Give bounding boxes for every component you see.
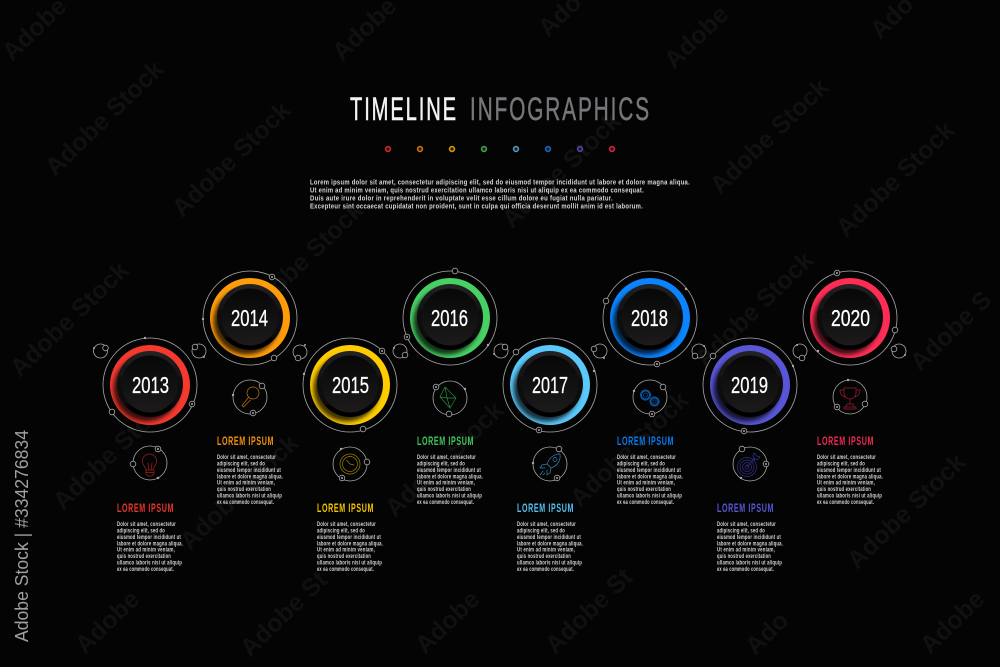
body 2019: ex ea commodo consequat. — [717, 566, 774, 573]
colored dots row — [386, 147, 614, 151]
watermark pattern: Adobe — [410, 585, 485, 659]
year 2017: 2017 — [532, 372, 568, 398]
body 2016: eiusmod tempor incididunt ut — [417, 467, 481, 474]
body 2013: adipiscing elit, sed do — [117, 527, 165, 534]
title: TIMELINE — [350, 91, 458, 127]
body 2017: ullamco laboris nisi ut aliquip — [517, 560, 582, 567]
watermark pattern: Ado — [740, 606, 794, 660]
watermark pattern: Adobe Stock — [5, 256, 134, 382]
watermark pattern: Adobe — [915, 585, 990, 659]
body 2018: ex ea commodo consequat. — [617, 499, 674, 506]
title — [350, 91, 651, 127]
body 2016: adipiscing elit, sed do — [417, 460, 465, 467]
year 2013: 2013 — [132, 372, 169, 398]
year 2018: 2018 — [631, 305, 668, 331]
body 2016: labore et dolore magna aliqua. — [417, 473, 483, 480]
body 2015: ullamco laboris nisi ut aliquip — [317, 560, 382, 567]
body 2017: Dolor sit amet, consectetur — [517, 521, 576, 528]
milestone 2018 — [603, 271, 697, 367]
milestone 2015 — [303, 338, 397, 432]
year 2016: 2016 — [431, 305, 468, 331]
body 2015: eiusmod tempor incididunt ut — [317, 534, 381, 541]
body 2014: quis nostrud exercitation — [217, 486, 271, 493]
body 2015: quis nostrud exercitation — [317, 553, 371, 560]
heading 2016: LOREM IPSUM — [417, 436, 474, 448]
body 2017: Ut enim ad minim veniam, — [517, 547, 575, 554]
body 2019: adipiscing elit, sed do — [717, 527, 765, 534]
watermark pattern: Adobe Stock — [167, 96, 296, 222]
year 2019: 2019 — [731, 372, 768, 398]
title: INFOGRAPHICS — [470, 91, 651, 127]
year 2015: 2015 — [332, 372, 369, 398]
heading 2019: LOREM IPSUM — [717, 503, 774, 515]
watermark pattern: Adobe Stock — [380, 396, 509, 522]
text block: 2015 — [317, 503, 383, 573]
body 2020: ex ea commodo consequat. — [817, 499, 874, 506]
body 2014: ex ea commodo consequat. — [217, 499, 274, 506]
body 2015: Dolor sit amet, consectetur — [317, 521, 376, 528]
text block: 2018 — [617, 436, 683, 506]
heading 2017: LOREM IPSUM — [517, 503, 574, 515]
body 2013: quis nostrud exercitation — [117, 553, 171, 560]
body 2015: labore et dolore magna aliqua. — [317, 540, 383, 547]
text block: 2019 — [717, 503, 783, 573]
body 2013 — [117, 521, 183, 573]
milestone 2014 — [202, 271, 297, 365]
body 2014: Dolor sit amet, consectetur — [217, 454, 276, 461]
body 2018: quis nostrud exercitation — [617, 486, 671, 493]
body 2017: ex ea commodo consequat. — [517, 566, 574, 573]
body 2018: ullamco laboris nisi ut aliquip — [617, 493, 682, 500]
body 2019: labore et dolore magna aliqua. — [717, 540, 783, 547]
body 2013: labore et dolore magna aliqua. — [117, 540, 183, 547]
icon: rocket — [532, 446, 567, 481]
body 2018: Dolor sit amet, consectetur — [617, 454, 676, 461]
text block: 2020 — [817, 436, 883, 506]
year 2020: 2020 — [831, 305, 870, 331]
body 2016: quis nostrud exercitation — [417, 486, 471, 493]
watermark pattern: Adobe S — [905, 286, 997, 376]
body 2018 — [617, 454, 683, 506]
body 2019: eiusmod tempor incididunt ut — [717, 534, 781, 541]
text block: 2016 — [417, 436, 483, 506]
watermark pattern: Adobe Stock — [497, 107, 626, 233]
body 2020: eiusmod tempor incididunt ut — [817, 467, 881, 474]
body 2016: Ut enim ad minim veniam, — [417, 480, 475, 487]
body 2016: ex ea commodo consequat. — [417, 499, 474, 506]
icon: gears — [633, 380, 667, 417]
body 2019: quis nostrud exercitation — [717, 553, 771, 560]
body 2018: Ut enim ad minim veniam, — [617, 480, 675, 487]
intro paragraph: Excepteur sint occaecat cupidatat non proident, sunt in culpa qui officia deserunt mollit anim id est laborum. — [310, 202, 643, 210]
intro paragraph: Lorem ipsum dolor sit amet, consectetur adipiscing elit, sed do eiusmod tempor incididunt ut labore et dolore magna aliqua. — [310, 178, 690, 186]
watermark pattern: Adobe Stock — [40, 55, 169, 181]
body 2020: Dolor sit amet, consectetur — [817, 454, 876, 461]
body 2020: Ut enim ad minim veniam, — [817, 480, 875, 487]
intro paragraph — [310, 178, 690, 210]
heading 2020: LOREM IPSUM — [817, 436, 874, 448]
watermark pattern: Adobe Stock — [831, 116, 960, 242]
heading 2014: LOREM IPSUM — [217, 436, 274, 448]
body 2017: eiusmod tempor incididunt ut — [517, 534, 581, 541]
body 2016: Dolor sit amet, consectetur — [417, 454, 476, 461]
body 2017: quis nostrud exercitation — [517, 553, 571, 560]
icon: light bulb — [130, 446, 167, 480]
body 2015: ex ea commodo consequat. — [317, 566, 374, 573]
watermark pattern: Adobe Stock — [48, 389, 177, 515]
body 2013: Ut enim ad minim veniam, — [117, 547, 175, 554]
body 2013: eiusmod tempor incididunt ut — [117, 534, 181, 541]
body 2015: Ut enim ad minim veniam, — [317, 547, 375, 554]
body 2019: Dolor sit amet, consectetur — [717, 521, 776, 528]
side credit: Adobe Stock | #334276834 — [12, 430, 32, 642]
milestone 2019 — [703, 338, 797, 434]
body 2020: adipiscing elit, sed do — [817, 460, 865, 467]
body 2019 — [717, 521, 783, 573]
icon: magnifier — [232, 380, 267, 416]
watermark pattern: Adobe Stock — [240, 196, 369, 322]
watermark pattern: Adobe Stock — [690, 246, 819, 372]
body 2015 — [317, 521, 383, 573]
intro paragraph: Duis aute irure dolor in reprehenderit in voluptate velit esse cillum dolore eu fugiat nulla pariatur. — [310, 194, 613, 202]
icon: target — [733, 446, 769, 481]
watermark pattern: Adobe Stock — [705, 73, 834, 199]
body 2018: adipiscing elit, sed do — [617, 460, 665, 467]
icon: clock — [333, 447, 370, 481]
watermark pattern: Adobe — [70, 585, 145, 659]
watermark pattern: Adobe Stock — [565, 386, 694, 512]
text block: 2014 — [217, 436, 283, 506]
watermark pattern: Adobe St — [235, 565, 334, 662]
year 2014: 2014 — [231, 305, 268, 331]
body 2020: quis nostrud exercitation — [817, 486, 871, 493]
watermark pattern: Adobe Stock — [175, 429, 304, 555]
text block: 2013 — [117, 503, 183, 573]
body 2016: ullamco laboris nisi ut aliquip — [417, 493, 482, 500]
watermark pattern: Adobe Stock — [842, 448, 971, 574]
body 2014: ullamco laboris nisi ut aliquip — [217, 493, 282, 500]
body 2014: labore et dolore magna aliqua. — [217, 473, 283, 480]
milestone 2020 — [803, 270, 898, 365]
body 2017: labore et dolore magna aliqua. — [517, 540, 583, 547]
icon: trophy — [833, 379, 868, 414]
body 2013: ex ea commodo consequat. — [117, 566, 174, 573]
body 2017: adipiscing elit, sed do — [517, 527, 565, 534]
body 2018: labore et dolore magna aliqua. — [617, 473, 683, 480]
body 2014 — [217, 454, 283, 506]
body 2019: ullamco laboris nisi ut aliquip — [717, 560, 782, 567]
small orbit connectors — [93, 344, 906, 361]
body 2014: Ut enim ad minim veniam, — [217, 480, 275, 487]
watermark pattern: Adobe — [659, 0, 734, 74]
body 2020 — [817, 454, 883, 506]
text block: 2017 — [517, 503, 583, 573]
heading 2018: LOREM IPSUM — [617, 436, 674, 448]
milestone 2013 — [103, 337, 197, 432]
body 2020: labore et dolore magna aliqua. — [817, 473, 883, 480]
body 2014: eiusmod tempor incididunt ut — [217, 467, 281, 474]
intro paragraph: Ut enim ad minim veniam, quis nostrud exercitation ullamco laboris nisi ut aliquip ex ea commodo consequat. — [310, 186, 644, 194]
body 2018: eiusmod tempor incididunt ut — [617, 467, 681, 474]
milestone 2016 — [403, 268, 497, 365]
milestone 2017 — [503, 338, 597, 433]
body 2015: adipiscing elit, sed do — [317, 527, 365, 534]
heading 2015: LOREM IPSUM — [317, 503, 374, 515]
heading 2013: LOREM IPSUM — [117, 503, 174, 515]
body 2017 — [517, 521, 583, 573]
watermark pattern: Adobe St — [540, 562, 639, 659]
body 2013: ullamco laboris nisi ut aliquip — [117, 560, 182, 567]
body 2020: ullamco laboris nisi ut aliquip — [817, 493, 882, 500]
icon: envelope — [433, 381, 467, 417]
body 2016 — [417, 454, 483, 506]
body 2013: Dolor sit amet, consectetur — [117, 521, 176, 528]
body 2019: Ut enim ad minim veniam, — [717, 547, 775, 554]
body 2014: adipiscing elit, sed do — [217, 460, 265, 467]
